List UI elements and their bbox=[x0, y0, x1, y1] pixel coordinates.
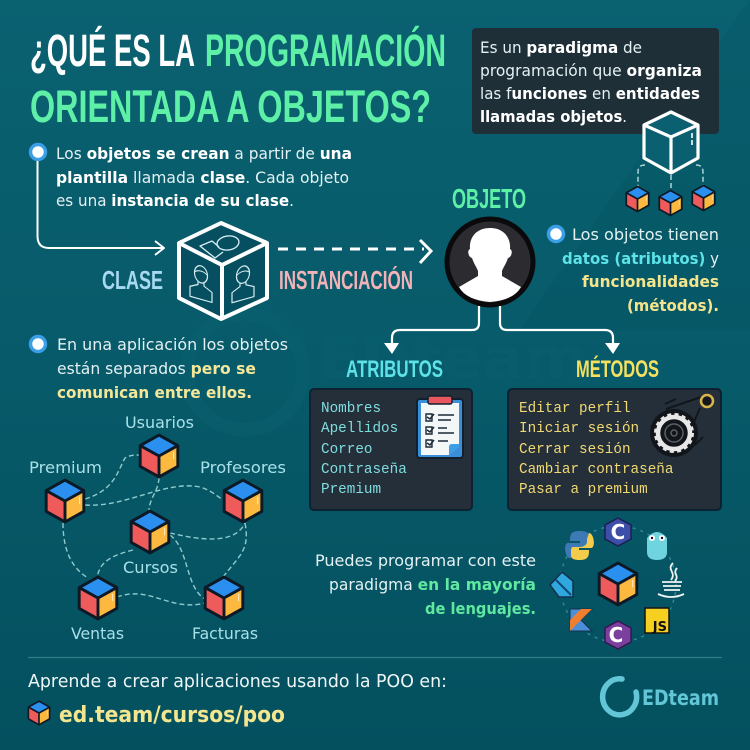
bullet and object explanation: (métodos). bbox=[627, 296, 719, 315]
label: clase: CLASE bbox=[102, 265, 163, 295]
bullet and class explanation: es una instancia de su clase. bbox=[56, 191, 294, 210]
panel: atributos: Correo bbox=[321, 442, 372, 458]
title: PROGRAMACIÓN bbox=[205, 25, 446, 76]
icon: gear and pulley bbox=[650, 395, 713, 457]
definition box bbox=[472, 28, 719, 134]
languages text: de lenguajes. bbox=[425, 599, 536, 618]
heading: atributos: ATRIBUTOS bbox=[346, 356, 443, 383]
icon: Java bbox=[658, 563, 684, 597]
bullet and object explanation: funcionalidades bbox=[582, 272, 719, 291]
label: instanciación: INSTANCIACIÓN bbox=[279, 265, 413, 295]
object network diagram: Facturas bbox=[192, 624, 258, 643]
footer call to action bbox=[28, 671, 447, 728]
panel: métodos: Cambiar contraseña bbox=[519, 462, 674, 478]
icon: object divided into smaller objects bbox=[626, 112, 715, 216]
object network diagram: Cursos bbox=[123, 558, 178, 577]
object network diagram bbox=[29, 413, 286, 643]
bullet and object explanation: datos (atributos) y bbox=[562, 249, 719, 268]
icon: Go gopher bbox=[647, 532, 667, 560]
panel: métodos bbox=[508, 389, 721, 510]
bullet and class explanation bbox=[30, 144, 352, 210]
object network diagram: Usuarios bbox=[125, 413, 194, 432]
panel: atributos: Premium bbox=[321, 482, 381, 498]
bullet and communication explanation bbox=[30, 335, 288, 402]
logo: EDteam: EDteam bbox=[642, 686, 719, 710]
background: EDteam bbox=[318, 324, 588, 392]
panel: métodos: Cerrar sesión bbox=[519, 442, 631, 458]
languages text bbox=[315, 551, 536, 618]
definition box: Es un paradigma de bbox=[480, 38, 642, 57]
arrow: to attributes bbox=[384, 306, 479, 354]
panel: atributos: Nombres bbox=[321, 401, 381, 417]
arrow: to methods bbox=[500, 306, 620, 354]
object network diagram: Ventas bbox=[71, 624, 124, 643]
panel: atributos: Contraseña bbox=[321, 462, 407, 478]
label: objeto: OBJETO bbox=[452, 183, 526, 214]
arrow: explanation to class bbox=[38, 161, 164, 255]
programming languages ring bbox=[550, 518, 684, 649]
bullet and class explanation: Los objetos se crean a partir de una bbox=[56, 144, 352, 163]
icon: Kotlin bbox=[570, 609, 592, 631]
icon: object avatar bbox=[447, 219, 533, 305]
panel: métodos: Iniciar sesión bbox=[519, 421, 639, 437]
icon: Python bbox=[565, 531, 594, 560]
title: ORIENTADA A OBJETOS? bbox=[30, 81, 431, 132]
panel: atributos bbox=[310, 389, 472, 510]
bullet and object explanation bbox=[548, 225, 719, 315]
icon: C sharp: C bbox=[609, 623, 623, 647]
divider bbox=[28, 656, 722, 658]
logo: EDteam bbox=[603, 679, 719, 715]
definition box: las funciones en entidades bbox=[480, 84, 700, 103]
title: ¿QUÉ ES LA bbox=[30, 25, 195, 76]
icon: C: C bbox=[611, 520, 625, 544]
bullet and communication explanation: En una aplicación los objetos bbox=[57, 335, 288, 354]
languages text: paradigma en la mayoría bbox=[329, 575, 536, 594]
languages text: Puedes programar con este bbox=[315, 551, 536, 570]
footer call to action: ed.team/cursos/poo bbox=[59, 703, 285, 728]
footer call to action: Aprende a crear aplicaciones usando la POO en: bbox=[28, 671, 447, 692]
object network diagram: Premium bbox=[29, 458, 102, 477]
definition box: programación que organiza bbox=[480, 61, 702, 80]
bullet and class explanation: plantilla llamada clase. Cada objeto bbox=[56, 168, 349, 187]
definition box: llamadas objetos. bbox=[480, 107, 627, 126]
heading: métodos: MÉTODOS bbox=[576, 355, 659, 383]
object network diagram: Profesores bbox=[200, 458, 286, 477]
icon: JavaScript: JS bbox=[652, 620, 667, 635]
bullet and object explanation: Los objetos tienen bbox=[572, 225, 719, 244]
title bbox=[30, 25, 446, 132]
icon: class cube bbox=[179, 223, 267, 319]
panel: atributos: Apellidos bbox=[321, 421, 398, 437]
panel: métodos: Editar perfil bbox=[519, 401, 631, 417]
bullet and communication explanation: están separados pero se bbox=[57, 359, 256, 378]
icon: clipboard bbox=[417, 396, 463, 458]
arrow: instantiation bbox=[278, 240, 431, 263]
bullet and communication explanation: comunican entre ellos. bbox=[57, 383, 252, 402]
panel: métodos: Pasar a premium bbox=[519, 482, 648, 498]
icon: Dart bbox=[550, 572, 573, 597]
